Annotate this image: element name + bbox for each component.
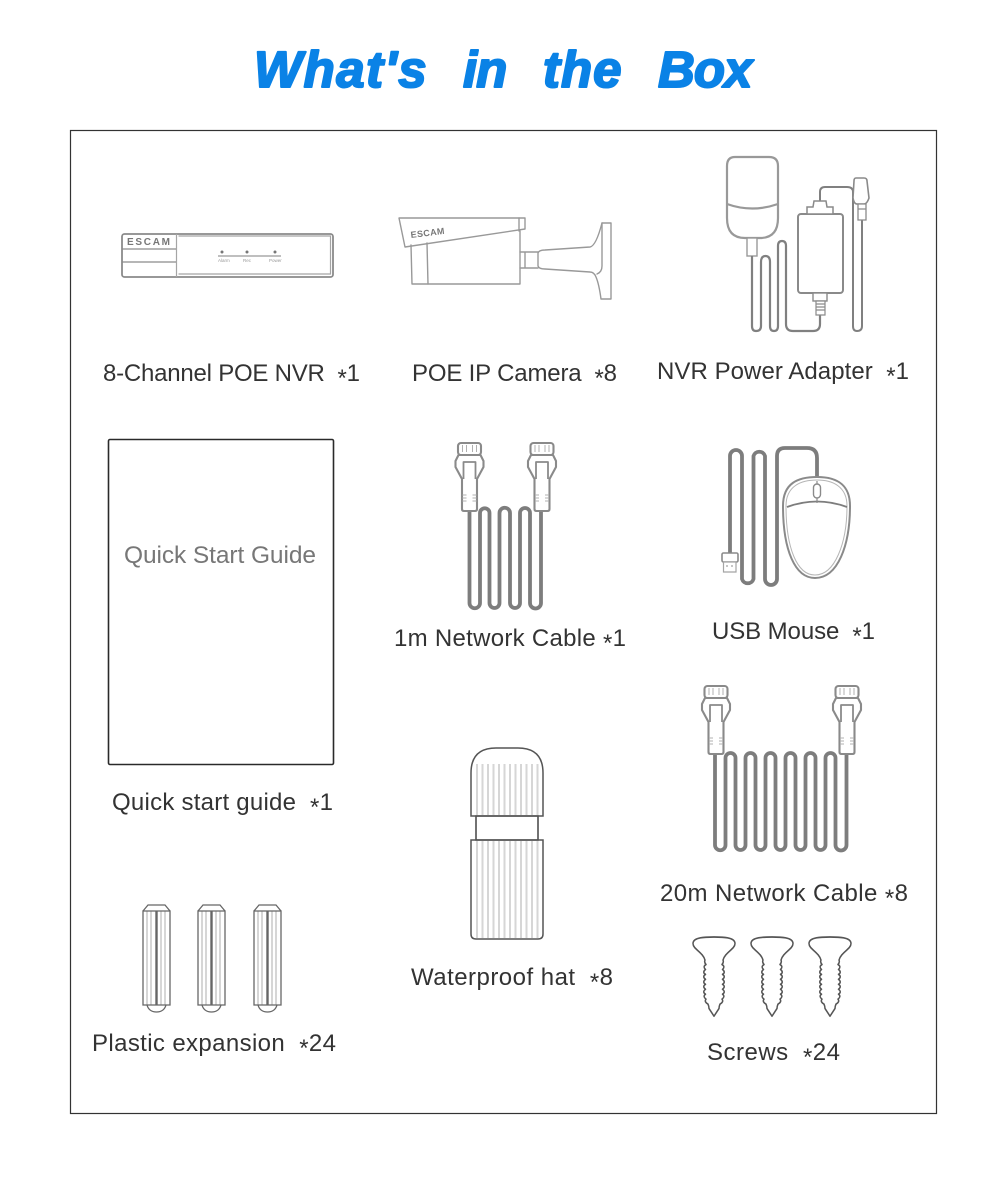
icon: plastic expansion anchors xyxy=(143,905,281,1012)
icon: 20m network cable xyxy=(702,686,861,850)
label: waterproof hat: Waterproof hat xyxy=(411,964,575,991)
label: 20m cable: 8 xyxy=(895,880,908,907)
label: camera: POE IP Camera xyxy=(412,360,582,387)
label: mouse: 1 xyxy=(862,618,875,645)
icon: waterproof hat xyxy=(471,748,543,939)
icon: NVR recorder: Rec xyxy=(243,258,252,263)
icon: 1m network cable xyxy=(456,443,556,608)
label: guide: * xyxy=(310,794,319,821)
panel: quick start guide booklet xyxy=(108,440,334,764)
label: guide: Quick start guide xyxy=(112,789,296,816)
label: adapter: * xyxy=(886,363,896,390)
icon: screws xyxy=(693,937,851,1016)
label: NVR: 8-Channel POE NVR xyxy=(103,360,325,387)
icon: NVR recorder xyxy=(122,234,333,277)
title: What's xyxy=(254,41,428,98)
icon: NVR recorder: Power xyxy=(269,258,282,263)
title: in xyxy=(463,41,506,98)
label: screws: 24 xyxy=(813,1039,840,1066)
title: Box xyxy=(658,41,755,98)
label: screws: * xyxy=(803,1044,812,1071)
icon: NVR recorder: Alarm xyxy=(218,258,230,263)
icon: power adapter xyxy=(727,157,869,331)
label: plastic expansion: 24 xyxy=(309,1030,336,1057)
label: waterproof hat: 8 xyxy=(600,964,613,991)
panel: quick start guide booklet: Quick Start Guide xyxy=(124,542,316,569)
label: camera: 8 xyxy=(604,360,617,387)
label: 1m cable: * xyxy=(603,630,612,657)
label: plastic expansion: Plastic expansion xyxy=(92,1030,285,1057)
label: NVR: * xyxy=(338,365,347,392)
panel: box contents frame xyxy=(70,130,936,1114)
title: the xyxy=(543,41,622,98)
label: camera: * xyxy=(594,365,604,392)
icon: USB mouse xyxy=(722,448,850,585)
label: 20m cable: 20m Network Cable xyxy=(660,880,877,907)
label: 1m cable: 1m Network Cable xyxy=(394,625,596,652)
label: 20m cable: * xyxy=(885,885,894,912)
label: guide: 1 xyxy=(320,789,333,816)
icon: IP camera xyxy=(399,218,611,299)
label: mouse: USB Mouse xyxy=(712,618,839,645)
label: waterproof hat: * xyxy=(590,969,599,996)
label: plastic expansion: * xyxy=(299,1035,309,1062)
label: 1m cable: 1 xyxy=(613,625,626,652)
label: mouse: * xyxy=(852,623,862,650)
label: screws: Screws xyxy=(707,1039,788,1066)
label: adapter: NVR Power Adapter xyxy=(657,358,873,385)
label: NVR: 1 xyxy=(347,360,360,387)
icon: IP camera: ESCAM xyxy=(410,226,445,240)
label: adapter: 1 xyxy=(896,358,909,385)
icon: NVR recorder: ESCAM xyxy=(127,237,170,248)
